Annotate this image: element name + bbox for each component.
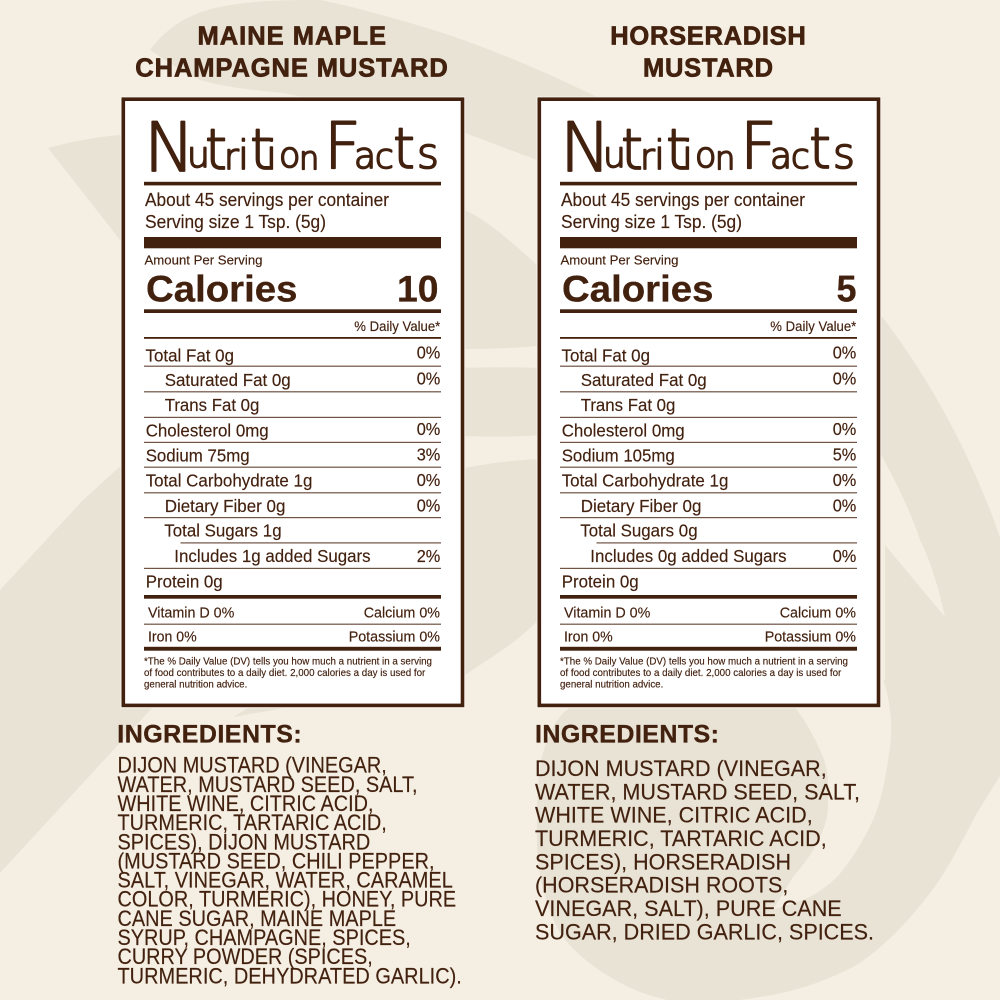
left product title: MAINE MAPLE <box>198 22 386 50</box>
heading: nutrition facts: n <box>715 139 735 177</box>
nutrient table: Sodium 105mg <box>562 446 675 466</box>
nutrient table: Saturated Fat 0g <box>581 370 707 390</box>
right product title: MUSTARD <box>643 55 773 83</box>
left product title: CHAMPAGNE MUSTARD <box>135 55 448 83</box>
nutrient table: 2% <box>417 546 441 566</box>
ingredients list left: DIJON MUSTARD (VINEGAR, <box>118 753 387 778</box>
calories: 5 <box>836 268 856 310</box>
nutrient table: 0% <box>833 368 857 388</box>
footnote: of food contributes to a daily diet. 2,000 calories a day is used for <box>560 668 842 679</box>
right ingredients <box>535 721 874 944</box>
serving info: About 45 servings per container <box>145 190 389 210</box>
nutrient table: 0% <box>833 419 857 439</box>
left ingredients <box>117 721 462 988</box>
nutrient table: 0% <box>833 470 857 490</box>
nutrient table: Sodium 75mg <box>146 446 250 466</box>
heading: nutrition facts: a <box>354 136 376 177</box>
nutrient table: Total Carbohydrate 1g <box>562 471 728 491</box>
ingredients list left: TURMERIC, DEHYDRATED GARLIC). <box>118 963 462 988</box>
nutrient table: Cholesterol 0mg <box>562 420 685 440</box>
heading: nutrition facts: i <box>682 133 693 179</box>
ingredients heading left: INGREDIENTS: <box>117 721 302 749</box>
heading: nutrition facts: t <box>809 117 831 182</box>
ingredients list right: (HORSERADISH ROOTS, <box>535 873 788 898</box>
ingredients list right: WHITE WINE, CITRIC ACID, <box>535 803 813 828</box>
ingredients list right <box>535 756 874 944</box>
footnote <box>560 656 848 691</box>
ingredients list left: WHITE WINE, CITRIC ACID, <box>118 791 374 816</box>
nutrient table: 0% <box>417 470 441 490</box>
serving info: Serving size 1 Tsp. (5g) <box>561 212 742 232</box>
ingredients list right: DIJON MUSTARD (VINEGAR, <box>535 756 827 781</box>
nutrient table: Dietary Fiber 0g <box>165 496 285 516</box>
heading: nutrition facts: c <box>375 137 394 177</box>
nutrient table: Total Carbohydrate 1g <box>146 471 312 491</box>
heading: nutrition facts: s <box>417 129 439 178</box>
footnote <box>144 656 432 691</box>
ingredients list left: SYRUP, CHAMPAGNE, SPICES, <box>118 925 411 950</box>
ingredients list right: TURMERIC, TARTARIC ACID, <box>535 826 827 851</box>
ingredients heading right: INGREDIENTS: <box>535 721 719 749</box>
nutrient table: Cholesterol 0mg <box>146 420 269 440</box>
ingredients list left: WATER, MUSTARD SEED, SALT, <box>118 772 418 797</box>
ingredients list left: TURMERIC, TARTARIC ACID, <box>118 810 387 835</box>
heading: nutrition facts: o <box>279 136 300 176</box>
panel: nutrition facts right <box>536 96 881 708</box>
heading: nutrition facts: t <box>621 118 643 183</box>
heading: nutrition facts: i <box>238 133 249 179</box>
daily value header: % Daily Value* <box>770 319 857 334</box>
ingredients list left <box>118 753 462 988</box>
ingredients list left: (MUSTARD SEED, CHILI PEPPER, <box>118 848 434 873</box>
vitamins and minerals: Potassium 0% <box>349 628 440 645</box>
heading: nutrition facts: r <box>640 137 655 178</box>
nutrient table: 0% <box>417 419 441 439</box>
calories: Calories <box>146 268 298 310</box>
heading: nutrition facts: o <box>695 136 716 176</box>
ingredients list right: VINEGAR, SALT), PURE CANE <box>535 896 842 921</box>
heading: nutrition facts: t <box>393 117 415 182</box>
footnote: of food contributes to a daily diet. 2,000 calories a day is used for <box>144 668 426 679</box>
footnote: *The % Daily Value (DV) tells you how much a nutrient in a serving <box>560 656 848 667</box>
heading: nutrition facts: c <box>791 137 810 177</box>
nutrient table: Protein 0g <box>562 571 639 591</box>
calories <box>144 252 438 310</box>
ingredients list right: SPICES), HORSERADISH <box>535 849 791 874</box>
heading: nutrition facts: n <box>299 139 319 177</box>
ingredients list right: SUGAR, DRIED GARLIC, SPICES. <box>535 919 874 944</box>
nutrient table: Total Sugars 0g <box>580 521 698 541</box>
heading: nutrition facts: t <box>666 118 688 183</box>
heading: nutrition facts: F <box>740 110 777 184</box>
serving info: Serving size 1 Tsp. (5g) <box>145 212 326 232</box>
left product title <box>135 22 448 83</box>
nutrient table: 0% <box>417 496 441 516</box>
calories: Amount Per Serving <box>560 252 678 267</box>
vitamins and minerals: Calcium 0% <box>780 605 856 622</box>
nutrient table: Includes 0g added Sugars <box>590 546 787 566</box>
footnote: general nutrition advice. <box>560 680 663 691</box>
ingredients list left: SALT, VINEGAR, WATER, CARAMEL <box>118 868 453 893</box>
nutrient table: Total Fat 0g <box>562 345 650 365</box>
serving info: About 45 servings per container <box>561 190 805 210</box>
right product title: HORSERADISH <box>610 22 806 50</box>
daily value header: % Daily Value* <box>354 319 441 334</box>
heading: nutrition facts: N <box>144 109 195 188</box>
heading: nutrition facts: t <box>205 118 227 183</box>
vitamins and minerals: Calcium 0% <box>364 605 440 622</box>
vitamins and minerals <box>144 605 441 645</box>
nutrient table: 0% <box>833 343 857 363</box>
footnote: *The % Daily Value (DV) tells you how much a nutrient in a serving <box>144 656 432 667</box>
vitamins and minerals: Potassium 0% <box>765 628 856 645</box>
vitamins and minerals: Iron 0% <box>148 628 197 645</box>
nutrient table: Dietary Fiber 0g <box>581 496 701 516</box>
nutrient table: Total Sugars 1g <box>164 521 282 541</box>
nutrient table <box>144 343 441 591</box>
nutrient table: 0% <box>417 343 441 363</box>
nutrient table: Includes 1g added Sugars <box>174 546 371 566</box>
heading: nutrition facts: s <box>833 129 855 178</box>
vitamins and minerals: Iron 0% <box>564 628 613 645</box>
heading: nutrition facts: u <box>603 135 626 176</box>
nutrient table: 3% <box>417 445 441 465</box>
nutrient table: Saturated Fat 0g <box>165 370 291 390</box>
nutrient table: 0% <box>833 496 857 516</box>
serving info <box>561 190 805 232</box>
heading: nutrition facts: F <box>324 110 361 184</box>
calories <box>560 252 856 310</box>
nutrient table: Trans Fat 0g <box>165 395 259 415</box>
calories: Calories <box>562 268 714 310</box>
ingredients list left: CURRY POWDER (SPICES, <box>118 944 373 969</box>
ingredients list right: WATER, MUSTARD SEED, SALT, <box>535 779 860 804</box>
calories: Amount Per Serving <box>144 252 262 267</box>
heading: nutrition facts: i <box>654 133 665 179</box>
ingredients list left: COLOR, TURMERIC), HONEY, PURE <box>118 887 456 912</box>
nutrient table: 5% <box>833 445 857 465</box>
nutrient table: Protein 0g <box>146 571 223 591</box>
serving info <box>145 190 389 232</box>
heading: nutrition facts: t <box>250 118 272 183</box>
right product title <box>610 22 806 83</box>
vitamins and minerals: Vitamin D 0% <box>564 605 650 622</box>
heading: nutrition facts: u <box>187 135 210 176</box>
nutrient table <box>560 343 857 591</box>
vitamins and minerals <box>560 605 857 645</box>
heading: nutrition facts: i <box>266 133 277 179</box>
vitamins and minerals: Vitamin D 0% <box>148 605 234 622</box>
nutrient table: 0% <box>833 546 857 566</box>
heading: nutrition facts: a <box>770 136 792 177</box>
ingredients list left: SPICES), DIJON MUSTARD <box>118 829 370 854</box>
heading: nutrition facts: r <box>224 137 239 178</box>
calories: 10 <box>397 268 438 310</box>
light crescent in swoosh <box>772 678 891 910</box>
ingredients list left: CANE SUGAR, MAINE MAPLE <box>118 906 396 931</box>
panel: nutrition facts left <box>120 96 465 708</box>
footnote: general nutrition advice. <box>144 680 247 691</box>
nutrient table: Trans Fat 0g <box>581 395 675 415</box>
heading: nutrition facts: N <box>560 109 611 188</box>
nutrient table: Total Fat 0g <box>146 345 234 365</box>
nutrient table: 0% <box>417 368 441 388</box>
